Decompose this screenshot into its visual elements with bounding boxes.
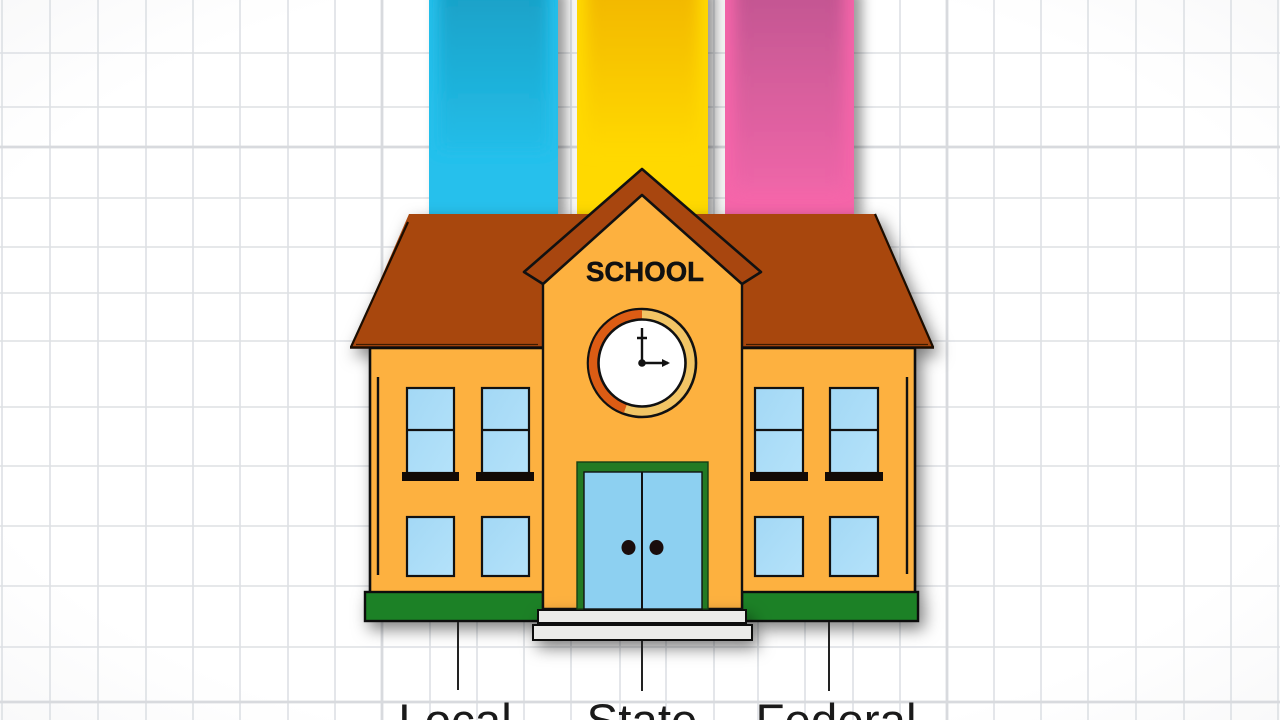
school building xyxy=(350,169,934,640)
window sills xyxy=(402,472,883,481)
main roof xyxy=(350,214,934,348)
bar: local funding (blue) xyxy=(429,0,558,220)
upper windows xyxy=(407,388,878,473)
school sign: SCHOOL xyxy=(586,256,704,287)
entrance steps xyxy=(533,610,752,640)
wall trim lines xyxy=(378,377,907,575)
labels xyxy=(398,695,917,720)
clock xyxy=(588,309,696,417)
center tower xyxy=(543,194,742,609)
wings wall xyxy=(370,348,915,593)
bar: federal funding (pink) xyxy=(725,0,854,220)
funding bars xyxy=(429,0,854,220)
connector lines xyxy=(458,622,829,691)
lower windows xyxy=(407,517,878,576)
bar: state funding (yellow) xyxy=(577,0,708,220)
main building body with shadow xyxy=(350,214,934,621)
green base left xyxy=(365,592,543,621)
gable roof xyxy=(524,169,761,284)
entrance door xyxy=(577,462,708,609)
green base right xyxy=(742,592,918,621)
